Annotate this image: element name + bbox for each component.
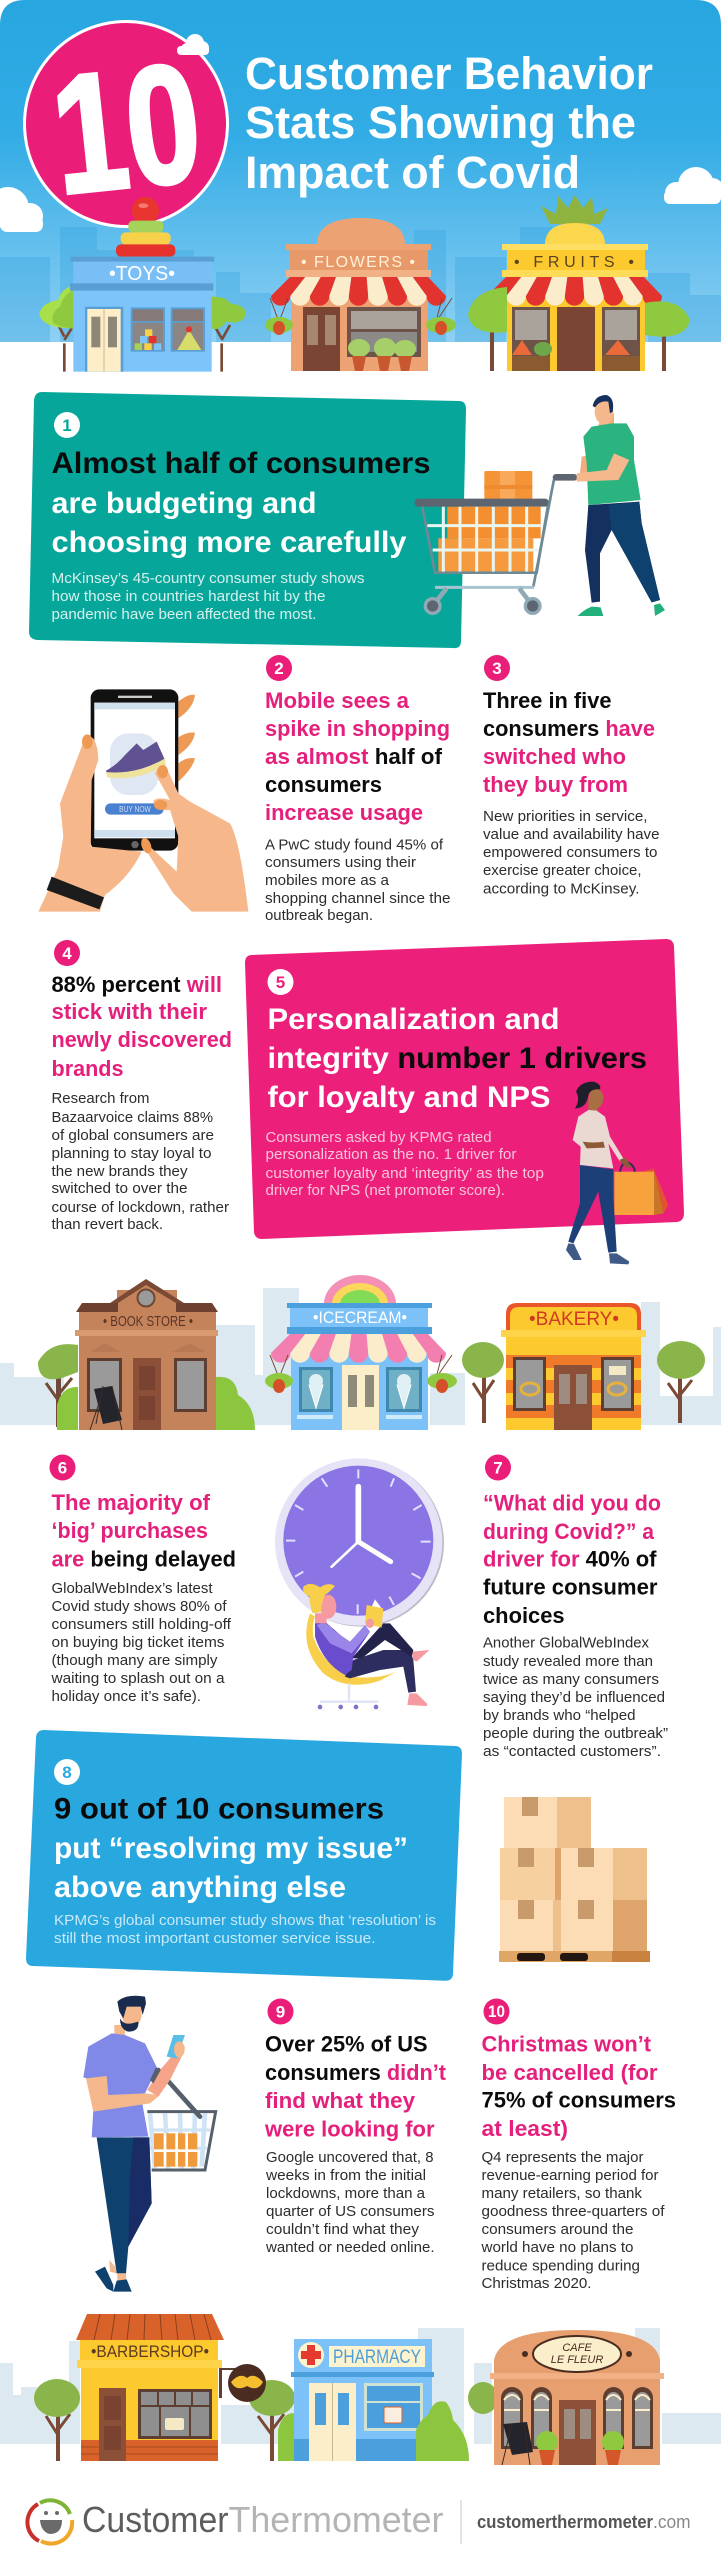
header banner [0,0,721,342]
heading 2: as almost half of [265,744,443,769]
shop: cafe: CAFE [562,2342,592,2354]
stat 6: 6 [58,1458,67,1478]
body 10: Q4 represents the major [482,2149,644,2166]
cloud on badge [177,34,209,55]
body 3: empowered consumers to [483,844,658,861]
number 5: 5 [276,973,285,992]
body 7 [483,1635,668,1760]
shop: bakery: •BAKERY• [529,1309,619,1330]
shop: cafe [468,2330,664,2465]
body 4: planning to stay loyal to [52,1145,212,1162]
stat 10 [480,1998,676,2292]
shop: fruits [468,195,690,371]
heading [52,447,431,559]
illustration: man with basket [83,1996,216,2292]
body text: how those in countries hardest hit by the [52,588,326,605]
body 2 [265,836,450,924]
heading 5 [268,1003,647,1114]
body 10: many retailers, so thank [482,2185,642,2202]
shop: ice cream [265,1275,457,1430]
street backdrop 3 [0,2328,721,2444]
body 4 [52,1090,229,1233]
heading 2: spike in shopping [265,716,450,741]
wordmark [82,2499,444,2540]
body 6: holiday once it’s safe). [52,1688,201,1705]
illustration: phone in hand [38,689,248,912]
man [83,1996,185,2292]
body 9: lockdowns, more than a [266,2185,426,2202]
stat 7 [483,1454,668,1760]
illustration: woman with bags [566,1082,668,1264]
body 4: the new brands they [52,1163,188,1180]
heading 4: stick with their [52,999,207,1024]
heading 3: Three in five [483,688,612,713]
wristband [47,877,104,909]
heading 7: driver for 40% of [483,1546,657,1572]
body 2: consumers using their [265,854,416,871]
body 10: consumers around the [482,2221,634,2238]
badge: number 10: 10 [44,28,209,230]
phone: BUY NOW [119,805,151,814]
chair [306,1613,397,1709]
panel 5: personalization [245,939,684,1239]
stat 6 [50,1454,236,1705]
heading 5: for loyalty and NPS [268,1081,550,1114]
heading 4: newly discovered [52,1027,232,1052]
stat 2: 2 [274,659,284,678]
shop: flowers: • FLOWERS • [301,254,417,271]
heading 4: brands [52,1056,124,1081]
stat 7: 7 [493,1458,503,1478]
body 4: course of lockdown, rather [52,1199,229,1216]
stat 3 [483,655,660,898]
body 6 [50,1580,232,1705]
heading 10: Christmas won’t [482,2031,652,2056]
body 9 [265,2149,434,2256]
left hand [38,737,142,912]
body 10: Christmas 2020. [482,2275,592,2292]
stat 4 [52,940,232,1233]
reading woman [303,1584,429,1706]
panel 8: resolving my issue [26,1730,462,1981]
body 6: on buying big ticket items [52,1634,224,1651]
body 3 [483,808,660,898]
body 5: Consumers asked by KPMG rated [266,1129,492,1146]
stat 3: 3 [492,659,502,678]
stat 9: 9 [276,2002,285,2022]
man [577,395,665,616]
body 7: study revealed more than [483,1653,653,1670]
shop: toys [39,197,246,372]
wordmark: Customer [82,2499,229,2540]
body 2: mobiles more as a [265,872,390,889]
shop: ice cream: •ICECREAM• [313,1308,407,1327]
heading 6: are being delayed [52,1546,236,1572]
title [245,48,653,198]
heading 8 [54,1793,408,1904]
body 3: according to McKinsey. [483,880,640,898]
stat 10: 10 [488,2002,505,2021]
title: Stats Showing the [245,97,636,148]
boxes in cart [438,471,541,572]
shop: book store: • BOOK STORE • [103,1313,193,1330]
heading 6: ‘big’ purchases [52,1518,208,1543]
body 10: revenue-earning period for [482,2167,659,2184]
heading 4: 88% percent will [52,972,222,997]
number 1: 1 [62,416,72,435]
body 10 [480,2149,665,2292]
body 4: Bazaarvoice claims 88% [52,1109,213,1126]
heading 10: 75% of consumers [482,2088,676,2113]
heading: are budgeting and [52,487,316,520]
number 5 [268,969,294,995]
heading 9: were looking for [264,2116,435,2142]
body 7: by brands who “helped [483,1707,636,1724]
body 3: value and availability have [483,826,660,843]
body 7: saying they’d be influenced [483,1689,665,1706]
heading 8: put “resolving my issue” [54,1832,408,1865]
illustration: clock with reading woman [275,1458,444,1709]
shopping cart [418,477,574,613]
body 9: couldn’t find what they [266,2221,420,2238]
heading 4 [52,972,232,1081]
logo: Customer Thermometer [27,2499,691,2544]
heading 9: Over 25% of US [265,2031,428,2056]
heading 6 [52,1490,236,1572]
body 8: still the most important customer service issue. [54,1930,376,1947]
body text: pandemic have been affected the most. [52,606,316,623]
body 7: people during the outbreak” [483,1725,668,1742]
heading: choosing more carefully [52,526,407,559]
stat 9 [264,1998,447,2256]
body 7: twice as many consumers [483,1671,659,1688]
panel 1: budgeting [29,392,466,648]
heading 7: during Covid?” a [483,1519,655,1544]
title: Impact of Covid [245,147,580,198]
body 3: New priorities in service, [483,808,648,825]
shop: flowers [265,218,456,371]
shop: barbershop: •BARBERSHOP• [91,2342,209,2361]
body 7: Another GlobalWebIndex [483,1635,649,1652]
title: Customer Behavior [245,48,653,99]
shop: cafe: LE FLEUR [551,2354,603,2366]
body 4: of global consumers are [52,1127,214,1144]
body 3: exercise greater choice, [483,862,642,879]
website: .com [653,2512,691,2532]
body 9: quarter of US consumers [266,2203,434,2220]
logo icon [27,2500,72,2544]
heading 3: consumers have [483,716,655,741]
body text: McKinsey’s 45-country consumer study shows [52,570,364,587]
heading 3 [483,688,655,797]
body 2: A PwC study found 45% of [265,836,444,854]
body 7: as “contacted customers”. [483,1743,661,1760]
heading 7: future consumer [483,1574,658,1600]
body 4: Research from [52,1090,150,1107]
body 6: waiting to splash out on a [50,1670,225,1687]
body 4: than revert back. [52,1216,163,1233]
basket [147,2070,216,2170]
number 8 [54,1759,80,1785]
heading 8: above anything else [54,1871,346,1904]
body 4: switched to over the [52,1180,188,1197]
body 9: wanted or needed online. [265,2239,434,2256]
body text [52,570,364,623]
cloud right [664,167,721,204]
body 9: weeks in from the initial [265,2167,426,2184]
shop: barbershop [34,2314,295,2461]
heading 6: The majority of [52,1490,211,1515]
cloud left [0,187,43,232]
heading 7: “What did you do [483,1491,661,1516]
body 6: Covid study shows 80% of [52,1598,227,1615]
number 1 [54,412,80,438]
body 8 [54,1912,436,1947]
number 8: 8 [62,1763,72,1782]
shop: fruits: • FRUITS • [514,254,636,271]
stat 2 [265,655,450,924]
heading: Almost half of consumers [52,447,431,480]
body 6: GlobalWebIndex’s latest [52,1580,213,1597]
body 8: KPMG’s global consumer study shows that ‘resolution’ is [54,1912,436,1929]
body 2: outbreak began. [265,907,373,924]
heading 10: be cancelled (for [482,2060,658,2085]
body 5: driver for NPS (net promoter score). [266,1182,505,1199]
heading 3: switched who [483,744,626,769]
heading 9: find what they [265,2088,416,2113]
body 2: shopping channel since the [265,890,450,907]
heading 2: Mobile sees a [265,688,410,713]
heading 10: at least) [482,2116,568,2141]
body 9: Google uncovered that, 8 [266,2149,434,2166]
heading 2: consumers [265,772,382,797]
heading 5: Personalization and [268,1003,560,1036]
body 10: goodness three-quarters of [482,2203,665,2220]
heading 9 [264,2031,447,2142]
shop: toys: •TOYS• [109,263,175,285]
heading 5: integrity number 1 drivers [268,1042,647,1075]
shop: pharmacy [278,2339,469,2461]
body 5: personalization as the no. 1 driver for [266,1146,516,1163]
website: customerthermometer [477,2512,653,2532]
heading 3: they buy from [483,772,628,797]
phone [91,689,178,851]
shop: pharmacy: PHARMACY [333,2347,421,2368]
body 6: (though many are simply [52,1652,218,1669]
body 10: reduce spending during [482,2257,640,2274]
wordmark: Thermometer [228,2499,444,2540]
body 5 [266,1129,544,1199]
street backdrop 2 [0,1288,721,1425]
heading 8: 9 out of 10 consumers [54,1793,384,1826]
heading 7: choices [483,1603,565,1628]
shop: book store [38,1279,255,1430]
illustration: shopper with cart [418,395,665,616]
clock [275,1458,444,1627]
heading 10 [482,2031,676,2141]
body 6: consumers still holding-off [52,1616,232,1633]
body 5: customer loyalty and ‘integrity’ as the top [266,1165,544,1182]
right hand [142,767,248,912]
heading 9: consumers didn’t [265,2060,447,2085]
shop: bakery [462,1303,705,1430]
heading 2 [265,688,450,825]
heading 7 [483,1491,661,1628]
illustration: stacked boxes [499,1797,650,1962]
body 10: world have no plans to [480,2239,634,2256]
stat 4: 4 [62,944,72,963]
heading 2: increase usage [265,800,423,825]
